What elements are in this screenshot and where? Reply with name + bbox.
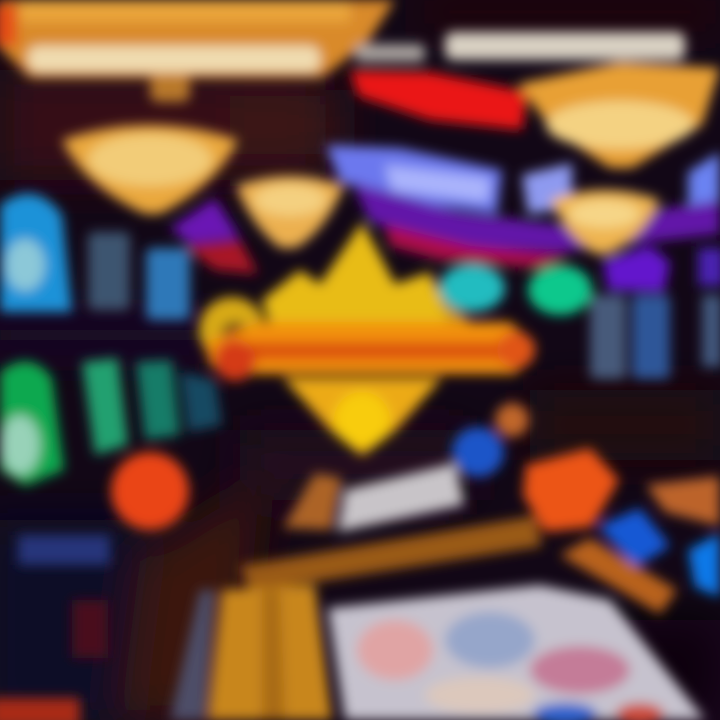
top right sign lettering — [355, 32, 685, 62]
blue figure centre — [452, 403, 529, 477]
blue and orange seats right — [560, 476, 720, 614]
purple and red accents beside logo — [170, 198, 258, 274]
slot machines right — [590, 246, 720, 379]
red glow bottom left — [0, 535, 110, 720]
orange ball left — [111, 452, 189, 530]
white game table bottom — [328, 585, 705, 720]
gold floor strip — [170, 585, 332, 720]
chandelier left — [62, 76, 238, 214]
white game table centre — [283, 463, 464, 532]
gold rail diagonal — [240, 516, 542, 592]
central casino logo — [199, 222, 536, 456]
slot machines lower left — [0, 358, 222, 486]
top marquee sign — [0, 0, 395, 78]
blue ceiling lights — [326, 145, 720, 214]
chandelier right — [518, 62, 720, 168]
purple and magenta ceiling band — [352, 182, 720, 268]
orange blob right — [523, 448, 619, 532]
chandelier centre — [236, 176, 344, 248]
red ceiling band — [350, 70, 528, 130]
chandelier lower right — [550, 190, 660, 254]
slot machines upper left — [0, 194, 190, 320]
teal and green lights — [439, 264, 592, 315]
